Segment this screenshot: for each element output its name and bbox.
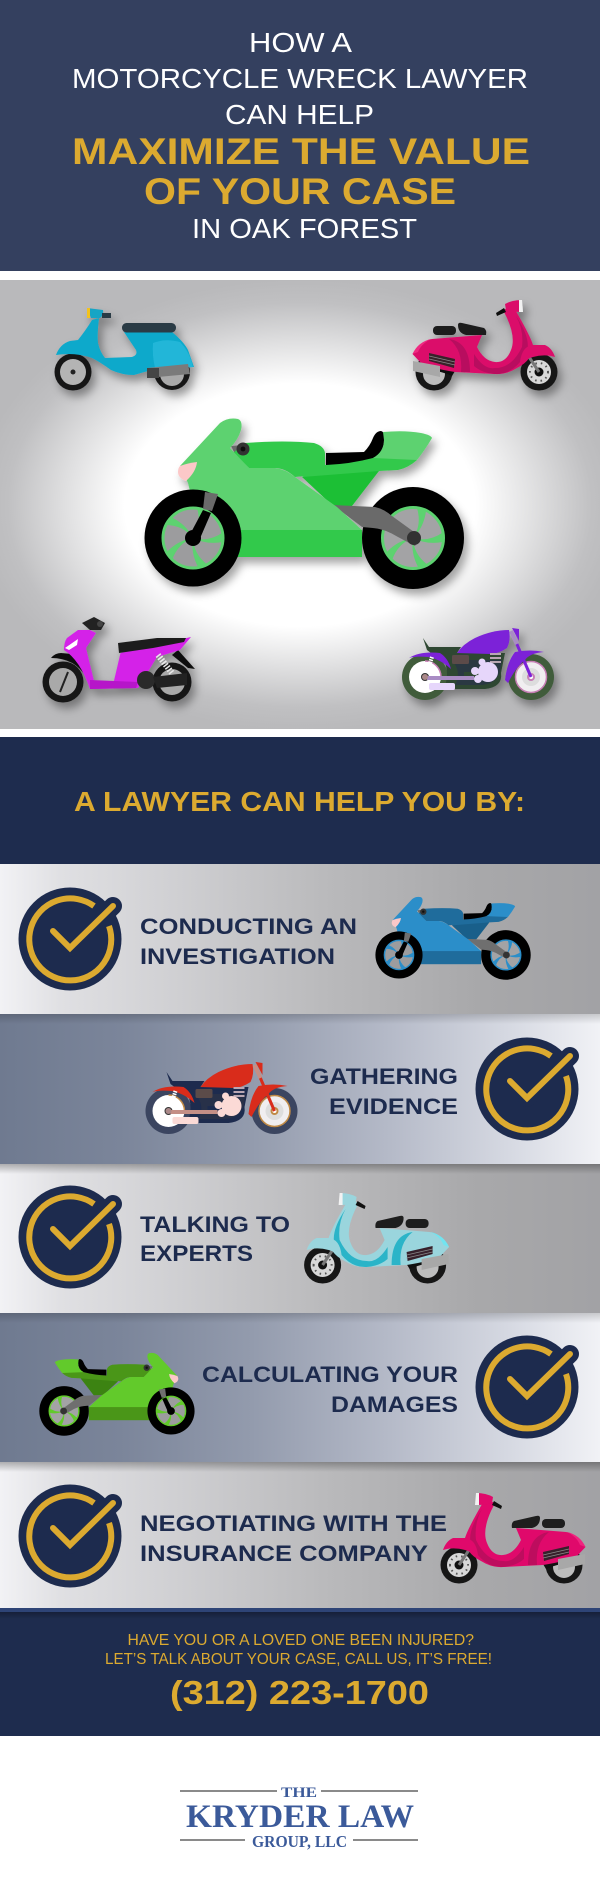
icon: pink scooter	[412, 300, 558, 390]
phone number: (312) 223-1700	[170, 1674, 429, 1711]
title	[72, 27, 530, 244]
icon: purple cruiser	[402, 628, 554, 700]
icon: red cruiser	[146, 1062, 298, 1134]
logo: the kryder law group	[180, 1785, 418, 1851]
logo: the kryder law group: KRYDER LAW	[186, 1799, 414, 1835]
panel: gathering evidence	[0, 1014, 600, 1164]
text: talking to experts	[140, 1212, 290, 1266]
icon: check badge	[18, 888, 122, 990]
panel: conducting an investigation	[0, 864, 600, 1014]
text: gathering evidence	[310, 1064, 458, 1119]
icon: teal scooter	[304, 1193, 449, 1284]
text: call to action	[105, 1632, 492, 1668]
icon: magenta scooter	[42, 617, 195, 702]
text: calculating your damages	[202, 1362, 458, 1417]
logo: the kryder law group: THE	[281, 1785, 317, 1801]
text: gathering evidence: EVIDENCE	[329, 1094, 458, 1119]
text: conducting an investigation: CONDUCTING AN	[140, 914, 357, 939]
icon: pink scooter	[440, 1493, 586, 1584]
text: negotiating with the insurance company	[140, 1511, 447, 1566]
panel: call to action	[0, 1608, 600, 1736]
panel: talking to experts	[0, 1164, 600, 1313]
logo: the kryder law group: GROUP, LLC	[252, 1832, 347, 1851]
text: gathering evidence: GATHERING	[310, 1064, 458, 1089]
icon: blue scooter	[54, 308, 194, 390]
panel: motorcycle hero	[0, 280, 600, 729]
heading: A LAWYER CAN HELP YOU BY:	[74, 786, 525, 817]
title: IN OAK FOREST	[192, 213, 417, 244]
title: CAN HELP	[225, 99, 374, 130]
icon: check badge	[476, 1336, 578, 1438]
icon: check badge	[18, 1186, 122, 1288]
icon: check badge	[476, 1038, 578, 1140]
panel: calculating your damages	[0, 1313, 600, 1462]
title: HOW A	[249, 27, 352, 58]
icon: check badge	[18, 1484, 122, 1588]
text: calculating your damages: CALCULATING YOUR	[202, 1362, 458, 1387]
header panel	[0, 0, 600, 271]
text: call to action: LET’S TALK ABOUT YOUR CASE, CALL US, IT’S FREE!	[105, 1651, 492, 1668]
text: negotiating with the insurance company: NEGOTIATING WITH THE	[140, 1511, 447, 1536]
text: talking to experts: TALKING TO	[140, 1212, 290, 1237]
text: conducting an investigation: INVESTIGATION	[140, 944, 335, 969]
title: OF YOUR CASE	[144, 171, 456, 212]
title: MOTORCYCLE WRECK LAWYER	[72, 63, 528, 94]
icon: green sport bike	[39, 1353, 195, 1436]
text: call to action: HAVE YOU OR A LOVED ONE BEEN INJURED?	[128, 1632, 474, 1649]
icon: green sport bike	[144, 418, 464, 589]
text: calculating your damages: DAMAGES	[331, 1392, 458, 1417]
icon: blue sport bike	[375, 897, 531, 980]
panel: negotiating with the insurance company	[0, 1462, 600, 1609]
text: negotiating with the insurance company: INSURANCE COMPANY	[140, 1541, 428, 1566]
text: talking to experts: EXPERTS	[140, 1241, 253, 1266]
title: MAXIMIZE THE VALUE	[72, 131, 530, 172]
text: conducting an investigation	[140, 914, 357, 969]
panel: lawyer can help heading	[0, 737, 600, 864]
